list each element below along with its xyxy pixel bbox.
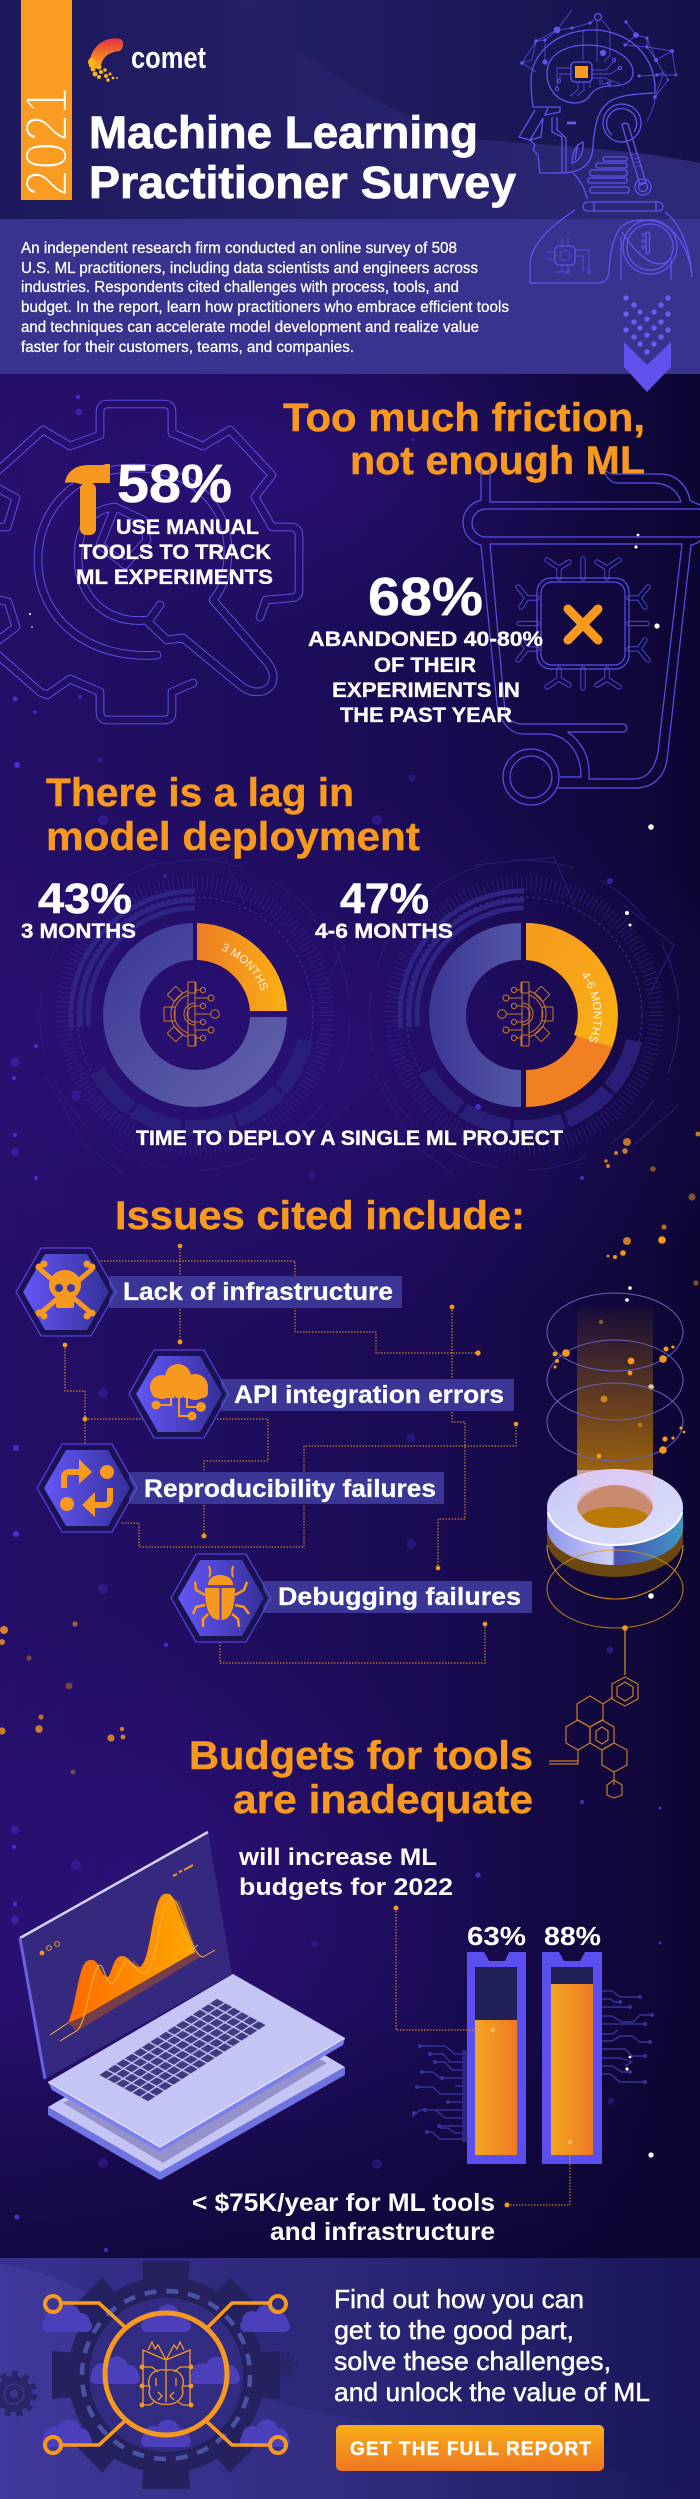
bar chart: 63 percent: 63%	[467, 1921, 526, 1951]
orange year ribbon: 2021	[13, 87, 80, 197]
page background	[0, 300, 700, 2264]
text: 75K per year: < $75K/year for ML tools	[192, 2189, 495, 2217]
comet logo	[88, 38, 206, 82]
footer call to action text: Find out how you can	[334, 2284, 584, 2314]
issue: API integration errors: API integration errors	[234, 1381, 504, 1409]
intro paragraph: U.S. ML practitioners, including data scientists and engineers across	[21, 260, 478, 277]
chart caption: TIME TO DEPLOY A SINGLE ML PROJECT	[136, 1127, 563, 1150]
heading: budgets for tools: Budgets for tools	[189, 1734, 533, 1778]
icon: molecule	[549, 1677, 638, 1798]
heading: lag in model deployment: model deployment	[46, 815, 420, 859]
heading: lag in model deployment	[46, 771, 420, 859]
issue: lack of infrastructure: Lack of infrastructure	[123, 1278, 393, 1306]
stat: 58 percent: TOOLS TO TRACK	[79, 541, 271, 564]
orange year ribbon	[13, 0, 80, 200]
arrow: dotted chevron pointing down	[623, 295, 671, 392]
heading: budgets for tools	[189, 1734, 533, 1822]
icon: bug	[193, 1566, 249, 1627]
stat: 47 percent	[315, 875, 453, 943]
text: 75K per year	[192, 2189, 495, 2246]
icon: book and brain	[140, 2342, 193, 2407]
footer call to action text: solve these challenges,	[334, 2346, 611, 2376]
dotted callouts to bars	[394, 1906, 572, 2208]
heading: too much friction: Too much friction,	[283, 396, 645, 440]
header panel	[0, 0, 700, 222]
stat: 68 percent: 68%	[368, 567, 483, 627]
footer panel	[0, 2258, 700, 2499]
text: will increase budgets: budgets for 2022	[239, 1874, 453, 1901]
donut chart: 3 months: 3 MONTHS	[222, 944, 268, 990]
heading: too much friction: not enough ML	[350, 439, 645, 483]
illustration: data ring with beam	[547, 1293, 683, 1675]
keyboard	[98, 1998, 267, 2102]
stat: 68 percent: THE PAST YEAR	[340, 704, 512, 727]
icon: small gears	[0, 2353, 295, 2414]
intro paragraph: budget. In the report, learn how practitioners who embrace efficient tools	[21, 299, 509, 316]
dotted connector lines	[63, 1244, 518, 1663]
stat: 58 percent: ML EXPERIMENTS	[76, 566, 273, 589]
issue: reproducibility failures: Reproducibility failures	[144, 1475, 436, 1503]
intro paragraph: An independent research firm conducted an online survey of 508	[21, 240, 457, 257]
chart on laptop screen	[40, 1865, 215, 2041]
intro band	[0, 219, 700, 374]
heading: too much friction	[283, 396, 645, 483]
donut chart: 3 months	[103, 923, 287, 1107]
stat: 47 percent: 47%	[340, 875, 429, 923]
background stars	[10, 395, 662, 2252]
footer call to action text	[334, 2284, 650, 2407]
stat: 68 percent	[308, 567, 543, 727]
intro paragraph: faster for their customers, teams, and companies.	[21, 339, 354, 356]
icon: skull and crossbones	[36, 1260, 96, 1320]
stat: 43 percent: 3 MONTHS	[21, 920, 136, 943]
title: Practitioner Survey	[89, 157, 516, 208]
stat: 43 percent	[21, 875, 136, 943]
comet logo: comet	[131, 40, 206, 75]
stat: 47 percent: 4-6 MONTHS	[315, 920, 453, 943]
title	[89, 107, 516, 208]
icon: gear and wrench outline	[0, 404, 299, 720]
decorative orange particles	[0, 1132, 700, 1774]
icon: robot head and shoulders line art	[519, 10, 692, 283]
title: Machine Learning	[89, 107, 478, 158]
illustration: laptop with chart	[20, 1832, 345, 2180]
intro paragraph	[21, 240, 509, 356]
chart decoration: HUD rings	[40, 857, 679, 1175]
issue: lack of infrastructure	[16, 1248, 402, 1336]
bar chart: 63 percent	[467, 1921, 526, 2164]
issue: debugging failures: Debugging failures	[278, 1583, 521, 1611]
icon: trash bin outline	[463, 470, 700, 805]
stat: 68 percent: EXPERIMENTS IN	[332, 679, 520, 702]
stat: 58 percent: 58%	[117, 454, 232, 514]
intro paragraph: industries. Respondents cited challenges with process, tools, and	[21, 279, 459, 296]
icon: large gear with circuit ring	[42, 2261, 290, 2489]
stat: 68 percent: ABANDONED 40-80%	[308, 628, 543, 651]
button: get the full report	[336, 2425, 604, 2471]
network constellation	[520, 10, 677, 121]
donut chart: 4-6 months: 4-6 MONTHS	[582, 974, 602, 1043]
donut chart: 4-6 months	[429, 923, 618, 1107]
heading: issues cited: Issues cited include:	[115, 1194, 525, 1238]
footer call to action text: and unlock the value of ML	[334, 2377, 650, 2407]
text: will increase budgets: will increase ML	[238, 1844, 437, 1871]
stat: 68 percent: OF THEIR	[374, 654, 476, 677]
footer call to action text: get to the good part,	[334, 2315, 574, 2345]
icon: chip with X	[518, 559, 648, 688]
icon: hammer	[65, 464, 110, 535]
intro paragraph: and techniques can accelerate model development and realize value	[21, 319, 479, 336]
bar chart: 88 percent: 88%	[544, 1921, 601, 1951]
icon: circular arrows	[60, 1459, 114, 1517]
stat: 58 percent	[76, 454, 273, 589]
text: 75K per year: and infrastructure	[270, 2218, 495, 2246]
issue: API integration errors	[129, 1350, 514, 1438]
heading: budgets for tools: are inadequate	[233, 1778, 533, 1822]
circuit traces beside bars	[412, 1988, 654, 2142]
icon: cloud network	[150, 1364, 208, 1420]
stat: 58 percent: USE MANUAL	[116, 516, 259, 539]
button: get the full report: GET THE FULL REPORT	[350, 2439, 591, 2460]
stat: 43 percent: 43%	[38, 875, 132, 923]
issue: debugging failures	[171, 1554, 532, 1642]
heading: lag in model deployment: There is a lag in	[46, 771, 354, 815]
issue: reproducibility failures	[37, 1444, 444, 1532]
text: will increase budgets	[238, 1844, 453, 1901]
bar chart: 88 percent	[542, 1921, 602, 2164]
